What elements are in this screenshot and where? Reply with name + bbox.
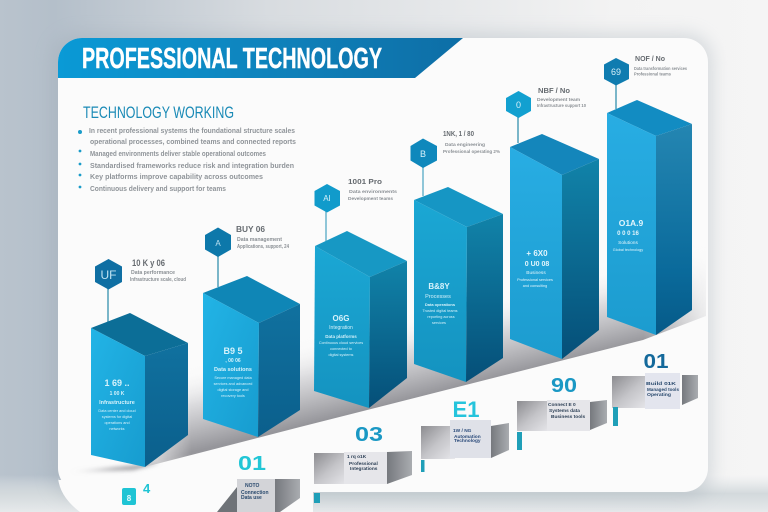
- column label: O1A.9: [619, 218, 644, 228]
- step text: Connection: [241, 490, 268, 496]
- callout: Data transformation services: [634, 66, 687, 72]
- column label: Solutions: [618, 240, 638, 246]
- column label: connected to: [330, 347, 352, 351]
- floor shadow under columns: [87, 277, 706, 474]
- callout: Professional operating 2%: [443, 149, 501, 155]
- column label: O6G: [333, 314, 349, 323]
- column label: [422, 282, 458, 325]
- column label: Data operations: [425, 302, 456, 307]
- callout: Data environments: [349, 189, 397, 195]
- callout: 10 K y 06: [132, 258, 165, 268]
- column 1: [91, 258, 188, 467]
- step 5: [517, 375, 607, 450]
- bullet list: Managed environments deliver stable operational outcomes: [90, 149, 266, 158]
- column label: digital storage and: [217, 388, 249, 392]
- header banner: [58, 38, 463, 78]
- column label: 1 69 ..: [104, 378, 130, 388]
- column 2: [203, 225, 300, 437]
- bullet list: Key platforms improve capability across outcomes: [90, 172, 263, 181]
- callout: Data management: [237, 237, 282, 243]
- connector and hexagon icon: [95, 259, 122, 322]
- step number: 01: [644, 351, 668, 373]
- column label: Trusted digital teams: [422, 309, 458, 313]
- column label: Data platforms: [325, 334, 357, 339]
- column 6: [604, 54, 692, 335]
- column label: recovery tools: [221, 394, 245, 398]
- step text: Professional: [349, 461, 378, 467]
- step number: E1: [452, 397, 480, 422]
- callout: Applications, support, 24: [237, 244, 289, 250]
- step number: 90: [551, 375, 577, 397]
- step text: Business tools: [551, 414, 585, 420]
- column label: operations and: [104, 421, 130, 425]
- bullet list: [89, 126, 296, 193]
- connector and hexagon icon: 0: [516, 100, 521, 110]
- column 4: [410, 129, 503, 382]
- step 2: [217, 453, 300, 512]
- column label: , 00 06: [225, 358, 241, 364]
- callout: Professional teams: [634, 72, 671, 78]
- step number: 01: [238, 453, 266, 475]
- step text: Integrations: [350, 466, 378, 472]
- column label: services: [432, 321, 446, 325]
- step text: Systems data: [549, 408, 580, 414]
- column label: Processes: [425, 294, 451, 300]
- column label: 0 U0 08: [525, 261, 549, 268]
- column 5: [506, 86, 599, 359]
- step text: [347, 454, 378, 472]
- connector and hexagon icon: [506, 91, 531, 143]
- bullet list: In recent professional systems the foundational structure scales: [89, 126, 295, 135]
- callout: [236, 225, 289, 250]
- step text: Data use: [241, 495, 262, 501]
- step text: [646, 381, 679, 398]
- column label: B&8Y: [428, 282, 450, 291]
- text block: intro: [78, 103, 296, 193]
- callout: [348, 177, 397, 202]
- step text: [241, 483, 268, 501]
- title: PROFESSIONAL TECHNOLOGY: [82, 43, 382, 75]
- callout: [537, 86, 586, 109]
- step 1 icons: [122, 481, 151, 505]
- step text: [453, 428, 481, 444]
- callout: Development teams: [348, 196, 393, 202]
- connector and hexagon icon: 69: [611, 67, 621, 77]
- callout: [634, 54, 687, 78]
- intro heading: TECHNOLOGY WORKING: [83, 103, 234, 122]
- bullet list: Continuous delivery and support for teams: [90, 184, 226, 193]
- column label: [319, 314, 363, 357]
- column label: B9 5: [223, 346, 243, 356]
- connector and hexagon icon: B: [420, 149, 426, 159]
- bullet list: Standardised frameworks reduce risk and integration burden: [90, 161, 294, 170]
- step text: [548, 402, 585, 420]
- callout: BUY 06: [236, 225, 266, 234]
- step text: Build 01K: [646, 381, 677, 387]
- connector and hexagon icon: AI: [323, 194, 331, 203]
- step text: Managed tools: [647, 387, 679, 393]
- connector and hexagon icon: UF: [100, 268, 116, 282]
- column label: 0 0 0 16: [617, 231, 640, 237]
- step text: 1W / NG: [453, 428, 472, 434]
- column label: Data solutions: [214, 367, 252, 373]
- step 6: [612, 351, 698, 426]
- connector and hexagon icon: [604, 58, 629, 109]
- step number: 03: [355, 424, 383, 446]
- column label: Global technology: [613, 248, 643, 252]
- step text: Operating: [647, 392, 671, 398]
- callout: NBF / No: [538, 86, 570, 95]
- step 4: [421, 397, 509, 472]
- callout: NOF / No: [635, 54, 665, 63]
- column label: Data center and cloud: [98, 409, 136, 413]
- callout: [130, 258, 186, 283]
- connector and hexagon icon: [314, 184, 340, 241]
- step text: Connect E 0: [548, 402, 576, 408]
- callout: Development team: [537, 97, 580, 103]
- column label: [517, 249, 553, 288]
- column label: reporting across: [427, 315, 455, 319]
- column label: services and advanced: [214, 382, 252, 386]
- step text: 1 rq o1K: [347, 454, 367, 460]
- column label: digital systems: [329, 353, 354, 357]
- step text: Automation: [454, 434, 481, 440]
- step 1 icons: 8: [127, 494, 132, 503]
- step text: Technology: [454, 438, 481, 444]
- column label: and consulting: [523, 284, 547, 288]
- connector and hexagon icon: A: [215, 239, 221, 248]
- bullet list: operational processes, combined teams and connected reports: [90, 137, 296, 146]
- column label: + 6X0: [526, 249, 548, 258]
- column label: Business: [526, 270, 546, 276]
- connector and hexagon icon: [410, 138, 437, 196]
- step 3: [314, 424, 412, 503]
- callout: Data performance: [131, 270, 175, 276]
- step 1 icons: 4: [143, 481, 151, 496]
- connector and hexagon icon: [205, 228, 231, 287]
- column label: Secure managed data: [214, 376, 253, 380]
- column label: Professional services: [517, 278, 553, 282]
- callout: 1NK, 1 / 80: [443, 129, 474, 138]
- callout: [443, 129, 501, 155]
- step text: NOTO: [245, 483, 259, 489]
- column label: systems for digital: [102, 415, 132, 419]
- callout: Data engineering: [445, 142, 485, 148]
- column label: Integration: [329, 325, 353, 331]
- column label: [214, 346, 253, 398]
- column label: [98, 378, 136, 431]
- column label: Continuous cloud services: [319, 341, 363, 345]
- column label: networks: [109, 427, 125, 431]
- column label: [613, 218, 644, 252]
- column label: 1 00 K: [110, 391, 125, 397]
- column 3: [314, 177, 407, 408]
- callout: 1001 Pro: [348, 177, 382, 186]
- callout: Infrastructure scale, cloud: [130, 277, 186, 283]
- column label: Infrastructure: [99, 400, 135, 406]
- callout: Infrastructure support 10: [537, 103, 586, 109]
